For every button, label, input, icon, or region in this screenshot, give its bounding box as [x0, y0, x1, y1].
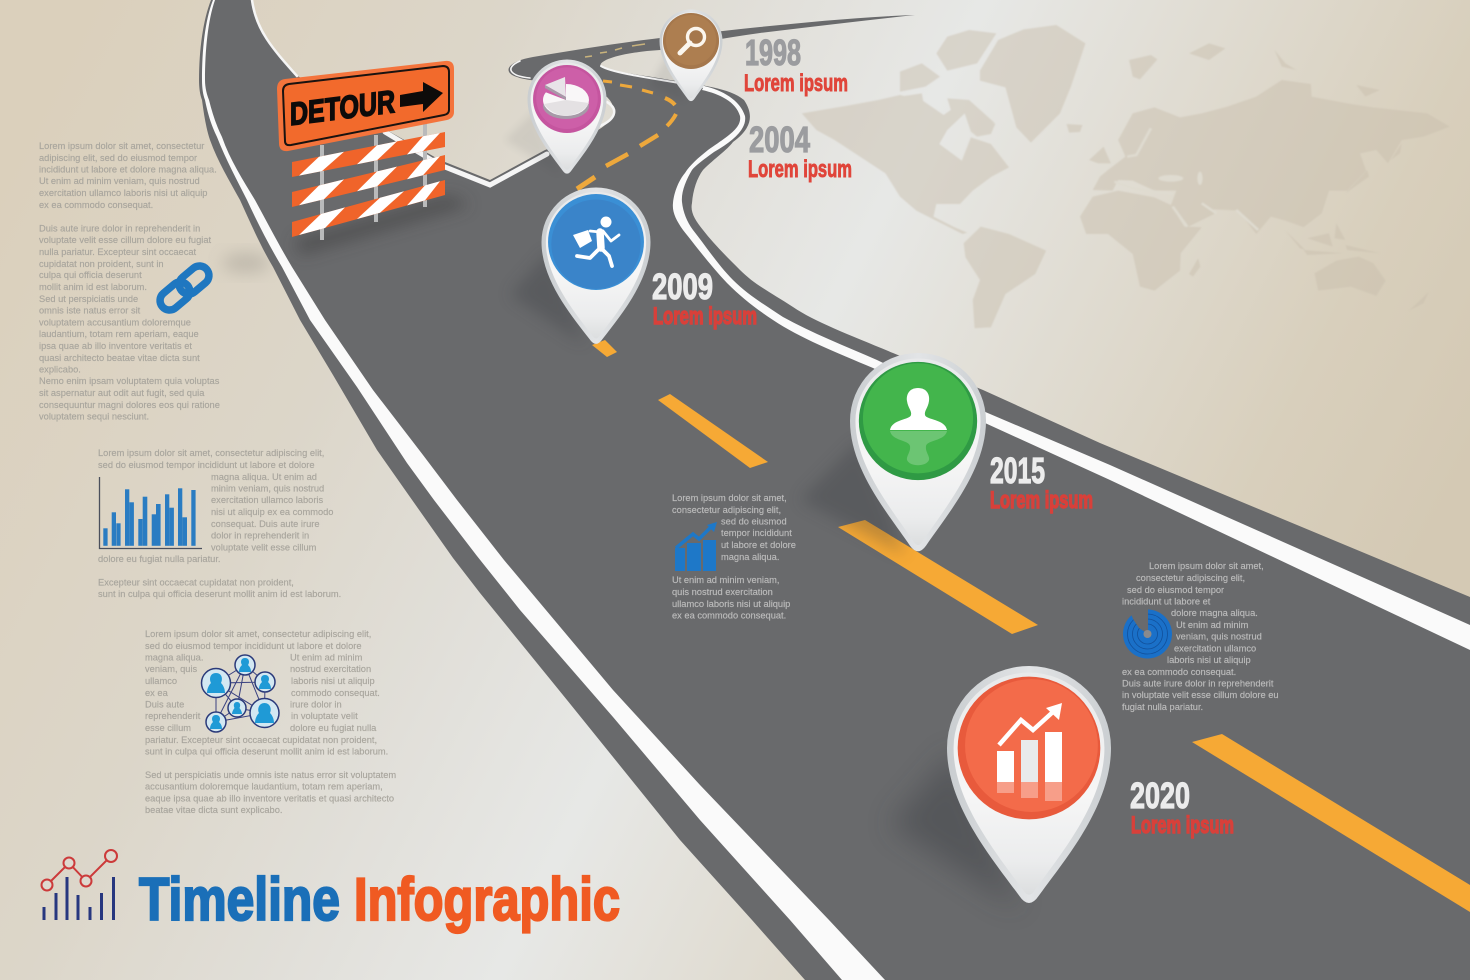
text block: network: pariatur. Excepteur sint occaecat cupidatat non proident,: [145, 735, 377, 745]
text block: network: ullamco: [145, 676, 177, 686]
text block: top left: Sed ut perspiciatis unde: [39, 294, 138, 304]
text block: network: ex ea: [145, 688, 169, 698]
barricade bars: [292, 132, 445, 237]
text block: bar chart: Lorem ipsum dolor sit amet, consectetur adipiscing elit,: [98, 448, 324, 458]
text block: top left: ipsa quae ab illo inventore veritatis et: [39, 341, 192, 351]
text block: network: irure dolor in: [290, 700, 342, 710]
year 2004: [748, 119, 852, 183]
text block: bar chart: sunt in culpa qui officia deserunt mollit anim id est laborum.: [98, 589, 341, 599]
icon: rising bars blue: [675, 522, 717, 571]
text block: bar chart: voluptate velit esse cillum: [211, 542, 317, 552]
text block: top left: explicabo.: [39, 364, 81, 374]
text block: top left: Lorem ipsum dolor sit amet, consectetur: [39, 141, 204, 151]
barricade posts: [320, 120, 427, 240]
text block: road right: Ut enim ad minim: [1176, 620, 1249, 630]
text block: network: nostrud exercitation: [290, 664, 371, 674]
icon: person: [890, 388, 947, 465]
text block: network: commodo consequat.: [291, 688, 380, 698]
text block: network: Duis aute: [145, 700, 184, 710]
year 2020: [1130, 775, 1234, 839]
text block: top left: cupidatat non proident, sunt in: [39, 259, 164, 269]
text block: bar chart: exercitation ullamco laboris: [211, 495, 323, 505]
text block: network: veniam, quis: [145, 664, 198, 674]
text block: road right: veniam, quis nostrud: [1176, 632, 1262, 642]
text block: top left: voluptate velit esse cillum dolore eu fugiat: [39, 235, 212, 245]
text block: road right: laboris nisi ut aliquip: [1167, 655, 1251, 665]
text block: network: esse cillum: [145, 723, 191, 733]
icon: pie chart: [543, 77, 589, 119]
detour barricade and sign: [277, 61, 454, 240]
text block: top left: omnis iste natus error sit: [39, 306, 141, 316]
text block: bar chart: sed do eiusmod tempor incididunt ut labore et dolore: [98, 460, 315, 470]
year 2015: 2015: [990, 450, 1045, 491]
text block: road right: exercitation ullamco: [1174, 644, 1256, 654]
year 2020: Lorem ipsum: [1131, 812, 1234, 839]
text block: road middle: tempor incididunt: [721, 528, 792, 538]
text block: road right: incididunt ut labore et: [1122, 596, 1211, 606]
text block: network: sunt in culpa qui officia deserunt mollit anim id est laborum.: [145, 746, 388, 756]
sign arrow: [400, 82, 443, 112]
text block: road middle: Lorem ipsum dolor sit amet,: [672, 493, 787, 503]
text block: road middle: ut labore et dolore: [721, 540, 796, 550]
text block: network: eaque ipsa quae ab illo inventore veritatis et quasi architecto: [145, 794, 394, 804]
text block: network: Ut enim ad minim: [290, 652, 363, 662]
road right white line: [673, 86, 1470, 650]
year 1998: [744, 32, 848, 97]
text block: bar chart: dolor in reprehenderit in: [211, 530, 309, 540]
text block: road right: in voluptate velit esse cillum dolore eu: [1122, 690, 1279, 700]
text block: network: accusantium doloremque laudantium, totam rem aperiam,: [145, 782, 383, 792]
text block: bar chart: consequat. Duis aute irure: [211, 519, 320, 529]
text block: road right: sed do eiusmod tempor: [1127, 585, 1224, 595]
text block: road middle: quis nostrud exercitation: [672, 587, 773, 597]
pin shadows: [505, 50, 1020, 910]
text block: road middle: [672, 493, 796, 620]
text block: top left: quasi architecto beatae vitae dicta sunt: [39, 353, 200, 363]
detour sign board: [277, 61, 454, 151]
text block: network: Sed ut perspiciatis unde omnis iste natus error sit voluptatem: [145, 770, 396, 780]
text block: bar chart: Excepteur sint occaecat cupidatat non proident,: [98, 578, 294, 588]
yellow lane dashes: [592, 340, 1470, 912]
text block: road right: fugiat nulla pariatur.: [1122, 702, 1203, 712]
text block: road middle: sed do eiusmod: [721, 516, 787, 526]
text block: bar chart: magna aliqua. Ut enim ad: [211, 472, 317, 482]
world map: [802, 25, 1450, 328]
text block: road right: Duis aute irure dolor in reprehenderit: [1122, 678, 1274, 688]
road inner white edges: [252, 0, 704, 185]
text block: network: magna aliqua.: [145, 652, 203, 662]
text block: road middle: consectetur adipiscing elit,: [672, 505, 781, 515]
text block: network: in voluptate velit: [291, 711, 358, 721]
icon: radial chart: [1123, 606, 1172, 658]
text block: road middle: ullamco laboris nisi ut aliquip: [672, 599, 790, 609]
year 2004: 2004: [749, 119, 810, 160]
text block: top left: Nemo enim ipsam voluptatem quia voluptas: [39, 376, 220, 386]
text block: road right: dolore magna aliqua.: [1171, 608, 1258, 618]
year 2015: [990, 450, 1093, 514]
sign text: DETOUR: [290, 83, 395, 132]
year 2004: Lorem ipsum: [748, 156, 852, 183]
text block: bar chart: nisi ut aliquip ex ea commodo: [211, 507, 333, 517]
pin: 2009: [542, 188, 650, 344]
pin: 1998: [660, 10, 722, 101]
title icon: [42, 850, 117, 920]
text block: top left: Duis aute irure dolor in reprehenderit in: [39, 224, 200, 234]
pin: 2015: [850, 353, 986, 551]
text block: top left: voluptatem sequi nesciunt.: [39, 412, 149, 422]
pin: pie chart: [528, 60, 606, 174]
text block: top left: voluptatem accusantium doloremque: [39, 318, 191, 328]
text block: bar chart: [98, 448, 341, 599]
text block: top left: incididunt ut labore et dolore magna aliqua.: [39, 164, 217, 174]
text block: top left: [39, 141, 220, 422]
text block: road right: consectetur adipiscing elit,: [1136, 573, 1245, 583]
text block: road middle: Ut enim ad minim veniam,: [672, 575, 779, 585]
title: Timeline: [139, 866, 340, 933]
text block: network: laboris nisi ut aliquip: [291, 676, 375, 686]
text block: top left: ex ea commodo consequat.: [39, 200, 153, 210]
text block: network: sed do eiusmod tempor incididunt ut labore et dolore: [145, 641, 362, 651]
title: [139, 866, 620, 933]
text block: top left: laudantium, totam rem aperiam, eaque: [39, 329, 199, 339]
year 1998: 1998: [745, 32, 801, 73]
text block: network: reprehenderit: [145, 711, 201, 721]
road left white line: [202, 0, 885, 980]
icon: magnifier: [680, 28, 704, 53]
text block: top left: adipiscing elit, sed do eiusmod tempor: [39, 153, 197, 163]
icon: rising bars: [997, 703, 1062, 801]
year 2009: Lorem ipsum: [653, 303, 757, 330]
shadow beside road: [222, 253, 270, 273]
icon: chain link: [156, 262, 213, 314]
text block: top left: consequuntur magni dolores eos qui ratione: [39, 400, 220, 410]
year 2020: 2020: [1130, 775, 1190, 816]
text block: network: Lorem ipsum dolor sit amet, consectetur adipiscing elit,: [145, 629, 371, 639]
text block: network: beatae vitae dicta sunt explicabo.: [145, 805, 282, 815]
text block: top left: sit aspernatur aut odit aut fugit, sed quia: [39, 388, 205, 398]
text block: top left: mollit anim id est laborum.: [39, 282, 147, 292]
year 2015: Lorem ipsum: [990, 487, 1093, 514]
pin: 2020: [947, 666, 1111, 903]
text block: road right: Lorem ipsum dolor sit amet,: [1149, 561, 1264, 571]
bar chart: [100, 477, 202, 548]
barricade shadow: [295, 195, 470, 255]
icon: people network: [202, 655, 279, 732]
text block: top left: Ut enim ad minim veniam, quis nostrud: [39, 176, 200, 186]
text block: road right: ex ea commodo consequat.: [1122, 667, 1236, 677]
text block: top left: exercitation ullamco laboris nisi ut aliquip: [39, 188, 207, 198]
year 1998: Lorem ipsum: [744, 70, 848, 97]
icon: running man: [573, 216, 619, 266]
text block: top left: nulla pariatur. Excepteur sint occaecat: [39, 247, 197, 257]
text block: network: dolore eu fugiat nulla: [290, 723, 377, 733]
text block: top left: culpa qui officia deserunt: [39, 270, 142, 280]
text block: road middle: ex ea commodo consequat.: [672, 610, 786, 620]
text block: bar chart: minim veniam, quis nostrud: [211, 484, 324, 494]
text block: road middle: magna aliqua.: [721, 552, 779, 562]
text block: network: [145, 629, 396, 815]
text block: bar chart: dolore eu fugiat nulla pariatur.: [98, 554, 220, 564]
text block: road right: [1122, 561, 1279, 712]
year 2009: 2009: [652, 266, 713, 307]
year 2009: [652, 266, 757, 330]
title: Infographic: [354, 866, 620, 933]
